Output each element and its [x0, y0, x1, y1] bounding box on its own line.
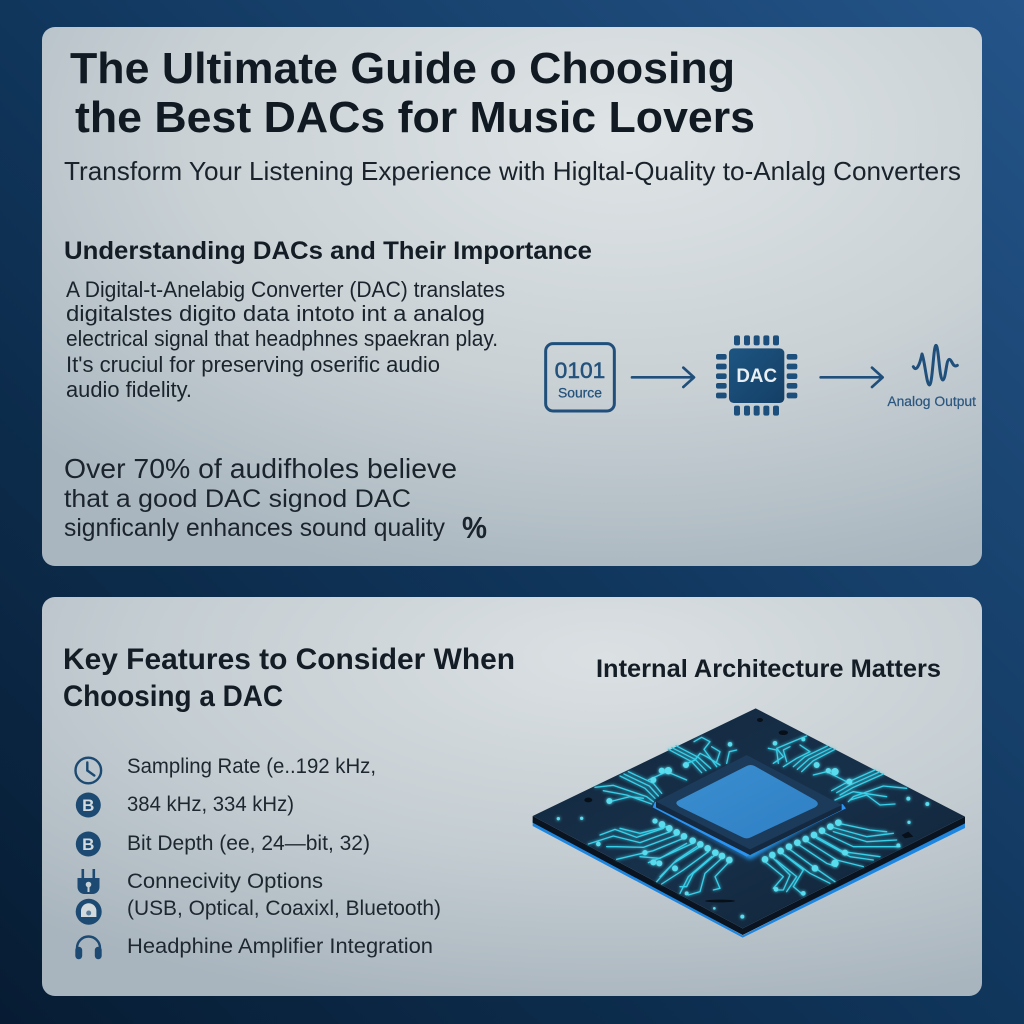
- bottom-left traces: [600, 828, 663, 837]
- icon: optical badge: [76, 899, 102, 925]
- text block: DAC explanation: A Digital-t-Anelabig Converter (DAC) translates: [66, 277, 505, 302]
- text block: audiophile statistic: Over 70% of audifholes believe: [64, 453, 457, 484]
- text block: audiophile statistic: %: [462, 510, 487, 545]
- feature list: (USB, Optical, Coaxixl, Bluetooth): [127, 896, 441, 920]
- heading: key features: Choosing a DAC: [63, 680, 283, 713]
- top-right traces: [802, 749, 835, 772]
- circuit traces: [588, 736, 907, 895]
- panel: understanding DACs: [42, 27, 982, 566]
- icon: B badge two: B: [82, 835, 94, 854]
- text block: DAC explanation: digitalstes digito data intoto int a analog: [66, 301, 485, 326]
- icon: source box: 0101: [555, 358, 605, 383]
- heading: key features: [63, 643, 515, 713]
- text block: DAC explanation: audio fidelity.: [66, 377, 192, 402]
- chip top surface: [676, 765, 818, 838]
- text block: audiophile statistic: that a good DAC signod DAC: [64, 485, 411, 513]
- title: [70, 44, 755, 142]
- icon: clock: [76, 758, 101, 783]
- bottom-right traces: [765, 862, 783, 888]
- icon: DAC chip: DAC: [736, 366, 777, 387]
- title: the Best DACs for Music Lovers: [75, 93, 755, 142]
- board: [533, 708, 965, 938]
- text block: DAC explanation: [66, 277, 505, 402]
- icon: analog waveform: [913, 345, 957, 385]
- panel: key features and architecture: [42, 597, 982, 996]
- feature list: Connecivity Options: [127, 869, 323, 893]
- text block: DAC explanation: electrical signal that headphnes spaekran play.: [66, 326, 498, 351]
- feature list: Headphine Amplifier Integration: [127, 934, 433, 958]
- heading: internal architecture: Internal Architecture Matters: [596, 655, 941, 683]
- icon: B badge one: B: [82, 796, 94, 815]
- feature list: Sampling Rate (e..192 kHz,: [127, 754, 376, 778]
- illustration: circuit board chip: [533, 708, 965, 938]
- icon: DAC chip: [716, 335, 797, 416]
- text block: audiophile statistic: signficanly enhances sound quality: [64, 514, 445, 542]
- label: analog output: Analog Output: [887, 394, 976, 409]
- text block: audiophile statistic: [64, 453, 487, 545]
- icon: plug: [78, 869, 100, 894]
- title: The Ultimate Guide o Choosing: [70, 44, 735, 93]
- arrow: DAC to output: [821, 368, 883, 387]
- arrow: source to DAC: [632, 368, 694, 387]
- solder nodes: [557, 737, 929, 919]
- icon: B badge two: [76, 832, 101, 856]
- chip glow: [653, 806, 843, 859]
- heading: key features: Key Features to Consider When: [63, 643, 515, 676]
- board blemishes: [584, 718, 913, 902]
- feature list: Bit Depth (ee, 24—bit, 32): [127, 831, 370, 855]
- icon: source box: Source: [558, 386, 602, 401]
- feature list: 384 kHz, 334 kHz): [127, 792, 294, 816]
- top-left traces: [668, 749, 702, 773]
- heading: understanding DACs: Understanding DACs and Their Importance: [64, 237, 592, 265]
- chip package: [653, 755, 846, 857]
- icon: B badge one: [76, 792, 101, 818]
- icon: source box: [546, 344, 614, 411]
- text block: DAC explanation: It's cruciul for preserving oserific audio: [66, 352, 440, 377]
- subtitle: Transform Your Listening Experience with Higltal-Quality to-Anlalg Converters: [64, 156, 961, 186]
- icon: headphones: [76, 937, 100, 958]
- feature list: [76, 754, 441, 958]
- diagram: signal flow: [546, 335, 976, 416]
